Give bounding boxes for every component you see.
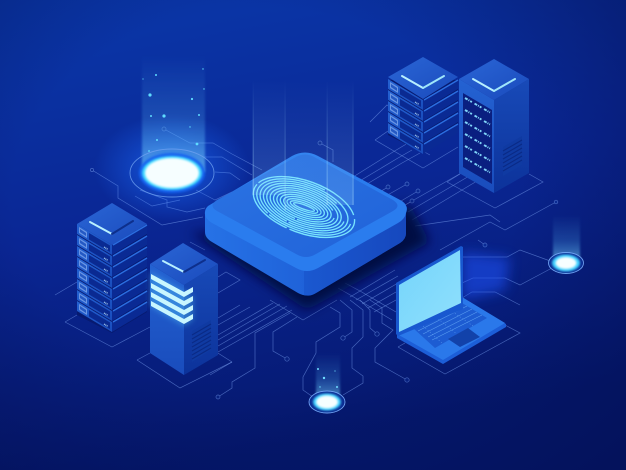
tower right face: [184, 264, 218, 375]
fingerprint scanning beams: [253, 80, 354, 210]
portal outer ring: [130, 149, 214, 197]
display data marks: [465, 98, 490, 172]
tower vent: [192, 320, 211, 362]
tower top face: [150, 243, 218, 285]
bottom portal core: [316, 396, 338, 408]
laptop keyboard: [413, 303, 487, 348]
portal cyan rim: [142, 156, 202, 190]
beam column left: [253, 80, 285, 195]
portal halo: [94, 114, 250, 222]
server rack: left stack: [77, 203, 147, 333]
server tower with light bars: [150, 243, 218, 375]
display tower vent: [503, 136, 522, 176]
data display panel: [463, 93, 492, 184]
right portal glow: [552, 254, 580, 272]
beam column middle: [285, 80, 327, 210]
laptop deck: [397, 297, 505, 360]
laptop lid: [396, 246, 463, 336]
fingerprint: [245, 164, 363, 250]
rack body shade: [388, 80, 458, 153]
bottom portal glow: [313, 394, 341, 410]
rack layers: [388, 79, 458, 154]
stack top face: [77, 203, 147, 245]
rack top face: [388, 57, 458, 99]
right small portal: [548, 215, 584, 274]
laptop screen: [399, 250, 461, 332]
beam edges: [253, 80, 354, 210]
tower glowing bars: [151, 274, 193, 324]
circuit board traces: [55, 105, 558, 399]
right portal ring: [548, 252, 584, 274]
laptop base: [397, 298, 506, 364]
beam column right: [327, 80, 353, 205]
server rack: top right stack: [388, 57, 458, 154]
stack shadow: [77, 225, 147, 333]
portal white core: [145, 158, 199, 188]
chip side faces: [205, 208, 406, 296]
stack layers: [77, 224, 147, 332]
right portal core: [556, 257, 576, 269]
display tower top face: [459, 59, 529, 100]
tower top light chevron: [163, 260, 205, 272]
server tower with data display: [459, 59, 529, 193]
chip shadow: [190, 205, 430, 310]
laptop screen glow: [462, 252, 510, 300]
display tower right face: [494, 79, 529, 193]
chip top face: [212, 154, 398, 257]
display tower top light chevron: [473, 79, 515, 91]
portal beam: [142, 55, 205, 172]
large glowing portal with light beam: [94, 55, 250, 222]
portal blue glow: [139, 153, 205, 193]
chip rim: [205, 152, 407, 271]
bottom portal sparkles: [317, 368, 338, 388]
bottom portal beam: [316, 353, 340, 400]
rack top light chevron: [402, 76, 444, 88]
stack top light chevron: [90, 221, 133, 234]
laptop: [396, 246, 510, 364]
central fingerprint chip: [190, 152, 430, 310]
chip right side: [304, 208, 406, 296]
portal sparkles: [142, 68, 205, 152]
right portal beam: [553, 215, 580, 262]
keyboard keys: [418, 306, 482, 344]
bottom small portal: [309, 353, 345, 413]
tower bar glow: [150, 272, 193, 326]
tower left face: [150, 264, 184, 375]
bottom portal ring: [309, 391, 345, 413]
display tower left face: [459, 79, 494, 193]
laptop touchpad: [448, 328, 480, 347]
